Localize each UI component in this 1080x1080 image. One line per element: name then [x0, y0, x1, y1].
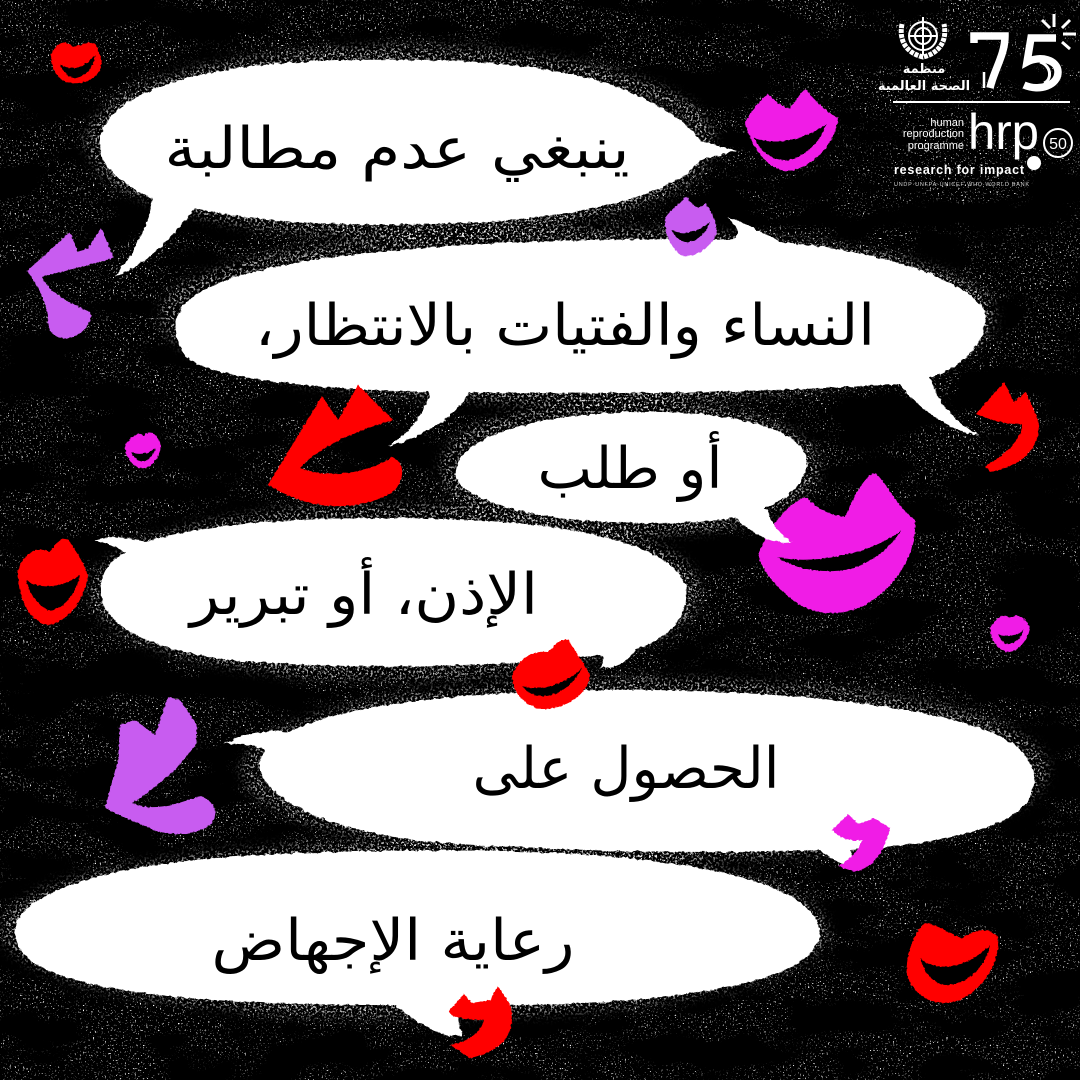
- logo: human reproduction programme: reproduction: [903, 128, 964, 140]
- logo: human reproduction programme: human: [930, 117, 964, 129]
- lips: purple small top: [665, 196, 716, 256]
- logo divider: [893, 101, 1070, 103]
- lips: purple big left: [105, 697, 215, 834]
- logo: hrp dot and 50 badge: 50: [1049, 136, 1067, 153]
- logo: WHO Arabic name: منظمة: [903, 62, 945, 77]
- lips: magenta top: [745, 89, 838, 171]
- logo: hrp: hrp: [968, 104, 1039, 160]
- lips: purple angular left: [27, 228, 114, 338]
- text line 5: الحصول على: [472, 736, 780, 802]
- logo: WHO emblem: [901, 17, 945, 57]
- bubble 4: [94, 518, 686, 668]
- logo: human reproduction programme: programme: [908, 140, 964, 152]
- logo: WHO Arabic name: [878, 62, 970, 94]
- bubble 5: [224, 690, 1034, 870]
- lips: red bottom: [446, 986, 512, 1058]
- lips: red angular: [268, 385, 402, 506]
- bubble 3 tail over big lips: [735, 503, 792, 543]
- text line 4: الإذن، أو تبرير: [187, 557, 538, 629]
- logo: human reproduction programme: [903, 117, 964, 152]
- logo: WHO Arabic name: الصحة العالمية: [878, 79, 970, 94]
- lips: magenta lower: [832, 814, 890, 872]
- bubble 3: [456, 412, 807, 523]
- bubble 2: [176, 217, 985, 446]
- logo: hrp dot and 50 badge: [1027, 129, 1072, 170]
- lips: small magenta right: [990, 616, 1030, 652]
- text line 1: ينبغي عدم مطالبة: [164, 116, 630, 182]
- text line 3: أو طلب: [538, 431, 722, 502]
- logos: [878, 14, 1076, 188]
- lips: red center: [512, 640, 590, 709]
- lips: red right: [976, 382, 1039, 472]
- lips: red left: [18, 538, 88, 625]
- bubble 6 tail over lips: [400, 1005, 455, 1036]
- lips: small magenta left: [125, 433, 161, 468]
- text line 6: رعاية الإجهاض: [212, 908, 574, 975]
- lips: red top left: [51, 42, 101, 83]
- speech text: [164, 116, 875, 975]
- bubble 1: [100, 60, 737, 277]
- text line 2: النساء والفتيات بالانتظار،: [255, 293, 875, 359]
- lips: red lower right: [907, 923, 998, 1003]
- bubble 6: [15, 850, 820, 1036]
- logo: 75 anniversary: [974, 14, 1076, 88]
- logo: partners line: UNDP·UNFPA·UNICEF·WHO·WORLD BANK: [894, 182, 1029, 188]
- logo: research for impact: research for impact: [894, 163, 1025, 177]
- lips: big magenta: [758, 473, 915, 613]
